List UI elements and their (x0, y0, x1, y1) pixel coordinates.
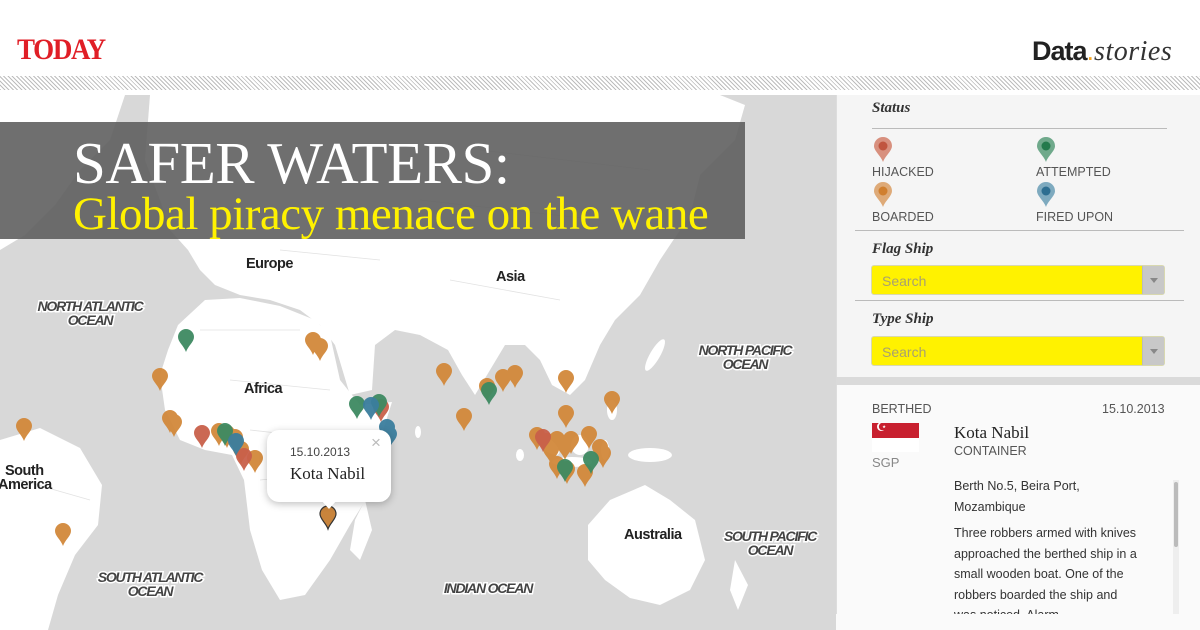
ocean labels: OCEAN (748, 542, 794, 558)
popup: Kota Nabil: × (371, 433, 381, 452)
legend: ATTEMPTED (1036, 165, 1111, 179)
side panel: incident detail: SGP (872, 455, 899, 470)
ocean labels: INDIAN OCEAN (444, 580, 534, 596)
search box: flag ship: Search (882, 273, 926, 289)
side panel: incident detail: CONTAINER (954, 444, 1027, 458)
continent labels (0, 256, 683, 543)
ocean labels: OCEAN (723, 356, 769, 372)
flag: Singapore (872, 423, 919, 452)
search box: flag ship (871, 265, 1165, 295)
scrollbar (1173, 480, 1179, 630)
legend (872, 137, 1113, 224)
selected marker: Kota Nabil (320, 506, 336, 529)
continent labels: Europe (246, 256, 293, 272)
legend: HIJACKED (872, 165, 934, 179)
incident markers (16, 329, 620, 546)
status heading: Status (872, 100, 910, 116)
legend: BOARDED (872, 210, 934, 224)
ocean labels (37, 298, 818, 599)
continent labels: Africa (244, 381, 284, 397)
ocean labels: NORTH PACIFIC (699, 342, 793, 358)
side panel: incident detail: BERTHED (872, 402, 932, 416)
popup: Kota Nabil (267, 430, 391, 502)
ocean labels: OCEAN (128, 583, 174, 599)
divider band (836, 377, 1200, 385)
legend: FIRED UPON (1036, 210, 1113, 224)
header logo: Data.stories: Data.stories (1032, 36, 1172, 67)
hatched band (0, 76, 1200, 90)
country borders hint (20, 150, 650, 500)
title banner (0, 122, 745, 239)
map panel (0, 95, 836, 630)
side panel: filters (836, 95, 1200, 378)
flag: Singapore: ☪ (876, 420, 887, 434)
side panel: incident detail: Kota Nabil (954, 423, 1029, 442)
continent labels: Asia (496, 269, 526, 285)
title banner: SAFER WATERS: (73, 130, 510, 196)
description text: Berth No.5, Beira Port, Mozambique Three robbers armed with knives approached the berthed ship in a small wooden boat. One of the robbers boarded the ship and was noticed. Alarm (954, 479, 1137, 622)
popup: Kota Nabil: Kota Nabil (290, 464, 365, 483)
continent labels: South (5, 463, 44, 479)
ocean labels: NORTH ATLANTIC (37, 298, 145, 314)
ocean labels: SOUTH PACIFIC (724, 528, 818, 544)
popup: Kota Nabil: 15.10.2013 (290, 445, 350, 459)
search box: type ship: Search (882, 344, 926, 360)
type ship heading: Type Ship (872, 311, 934, 327)
ocean labels: OCEAN (68, 312, 114, 328)
continent labels: Australia (624, 527, 683, 543)
ocean labels: SOUTH ATLANTIC (98, 569, 204, 585)
flag ship heading: Flag Ship (872, 241, 933, 257)
title banner: Global piracy menace on the wane (73, 188, 708, 240)
side panel: incident detail: 15.10.2013 (1102, 402, 1165, 416)
header logo: TODAY: TODAY (17, 33, 105, 66)
search box: type ship (871, 336, 1165, 366)
side panel: incident detail (836, 385, 1200, 630)
